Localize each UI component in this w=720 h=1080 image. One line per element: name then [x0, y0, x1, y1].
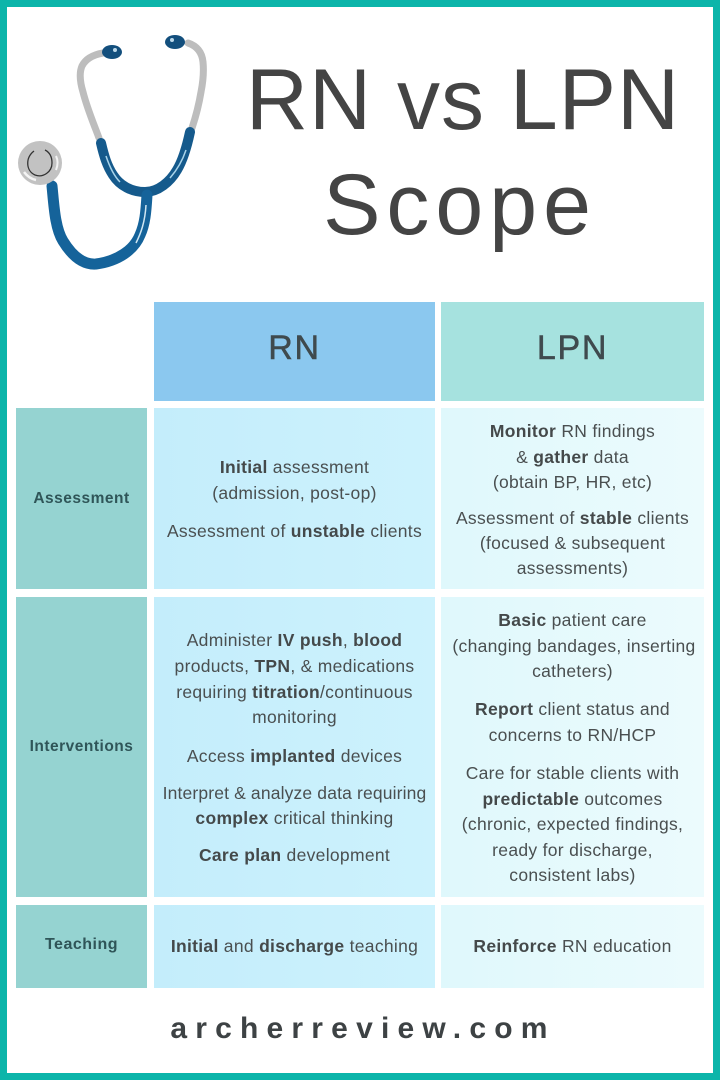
panel: LPN assessment: Monitor RN findings	[490, 421, 655, 441]
panel: LPN assessment: & gather data	[516, 447, 629, 467]
panel: RN interventions: Care plan development	[199, 845, 390, 865]
panel: LPN assessment: (focused & subsequent	[480, 533, 665, 553]
panel: RN interventions: requiring titration/continuous	[176, 682, 413, 702]
panel: RN interventions	[154, 597, 435, 897]
panel: RN assessment: (admission, post-op)	[212, 483, 377, 503]
panel: LPN interventions	[441, 597, 704, 897]
column header: RN	[154, 302, 435, 401]
row label: Interventions: Interventions	[30, 738, 133, 755]
panel: LPN interventions: consistent labs)	[509, 865, 636, 885]
panel: LPN interventions: (changing bandages, inserting	[452, 636, 696, 656]
panel: LPN teaching: Reinforce RN education	[473, 936, 672, 956]
row label: Teaching	[16, 905, 147, 988]
panel: LPN assessment: (obtain BP, HR, etc)	[493, 472, 652, 492]
panel: RN teaching: Initial and discharge teaching	[171, 936, 418, 956]
column header: RN: RN	[268, 329, 321, 367]
panel: LPN interventions: predictable outcomes	[482, 789, 663, 809]
panel: RN assessment	[154, 408, 435, 589]
panel: LPN interventions: Basic patient care	[498, 610, 647, 630]
title	[246, 52, 680, 253]
panel: LPN interventions: (chronic, expected findings,	[462, 814, 683, 834]
title line 1: RN vs LPN	[246, 52, 680, 148]
title line 2: Scope	[323, 157, 597, 253]
panel: RN interventions: Interpret & analyze data requiring	[163, 783, 426, 803]
icon: stethoscope	[18, 35, 207, 270]
row label: Teaching: Teaching	[45, 936, 118, 953]
panel: LPN teaching	[441, 905, 704, 988]
panel: RN interventions: Access implanted devices	[187, 746, 402, 766]
panel: LPN interventions: ready for discharge,	[492, 840, 653, 860]
panel: LPN interventions: catheters)	[532, 661, 613, 681]
column header: LPN: LPN	[537, 329, 608, 367]
panel: RN interventions: products, TPN, & medications	[175, 656, 414, 676]
panel: LPN interventions: Report client status and	[475, 699, 670, 719]
panel: RN assessment: Initial assessment	[220, 457, 369, 477]
panel: RN interventions: monitoring	[252, 707, 337, 727]
panel: LPN interventions: concerns to RN/HCP	[489, 725, 656, 745]
row label: Assessment	[16, 408, 147, 589]
panel: RN teaching	[154, 905, 435, 988]
footer website: archerreview.com	[170, 1012, 556, 1045]
row label: Interventions	[16, 597, 147, 897]
panel: LPN interventions: Care for stable clients with	[466, 763, 679, 783]
row label: Assessment: Assessment	[33, 490, 130, 506]
column header: LPN	[441, 302, 704, 401]
panel: RN interventions: Administer IV push, blood	[187, 630, 402, 650]
panel: RN interventions: complex critical thinking	[195, 808, 394, 828]
panel: LPN assessment: Assessment of stable clients	[456, 508, 689, 528]
panel: LPN assessment	[441, 408, 704, 589]
panel: RN assessment: Assessment of unstable clients	[167, 521, 422, 541]
panel: LPN assessment: assessments)	[517, 558, 628, 578]
